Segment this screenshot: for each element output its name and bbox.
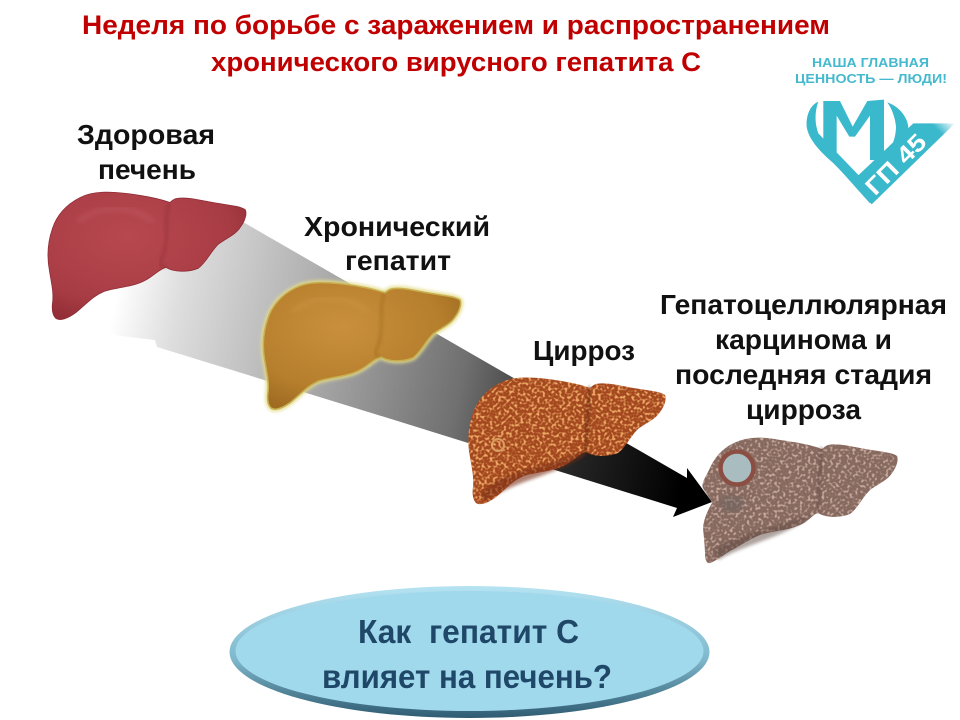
liver: end-stage with tumor [702,438,898,563]
label: hepatocellular carcinoma: последняя стадия [675,359,932,390]
callout: question bubble: Как гепатит С [358,614,579,651]
logo: heart GP 45 [795,55,955,204]
logo: heart GP 45: ЦЕННОСТЬ — ЛЮДИ! [795,71,947,86]
label: chronic hepatitis: Хронический [304,211,490,242]
title: хронического вирусного гепатита С [211,47,701,77]
label: chronic hepatitis [304,211,490,276]
logo: heart GP 45: ГП 45 [860,129,932,201]
label: chronic hepatitis: гепатит [345,245,451,276]
liver: healthy [48,193,246,319]
icon: tumor [720,452,754,484]
title: Неделя по борьбе с заражением и распространением [82,10,830,40]
liver: chronic hepatitis [263,283,461,409]
callout: question bubble: влияет на печень? [322,659,612,696]
label: hepatocellular carcinoma: Гепатоцеллюлярная [660,289,947,320]
logo: heart GP 45: НАША ГЛАВНАЯ [812,55,929,70]
label: healthy liver [77,119,215,185]
liver: cirrhosis [468,378,666,504]
callout: question bubble [230,586,710,718]
title [82,10,830,77]
label: hepatocellular carcinoma [660,289,947,425]
arrow: progression [60,222,712,517]
label: hepatocellular carcinoma: цирроза [746,394,861,425]
label: healthy liver: Здоровая [77,119,215,150]
label: healthy liver: печень [98,154,196,185]
label: cirrhosis: Цирроз [533,335,635,366]
label: hepatocellular carcinoma: карцинома и [715,324,892,355]
